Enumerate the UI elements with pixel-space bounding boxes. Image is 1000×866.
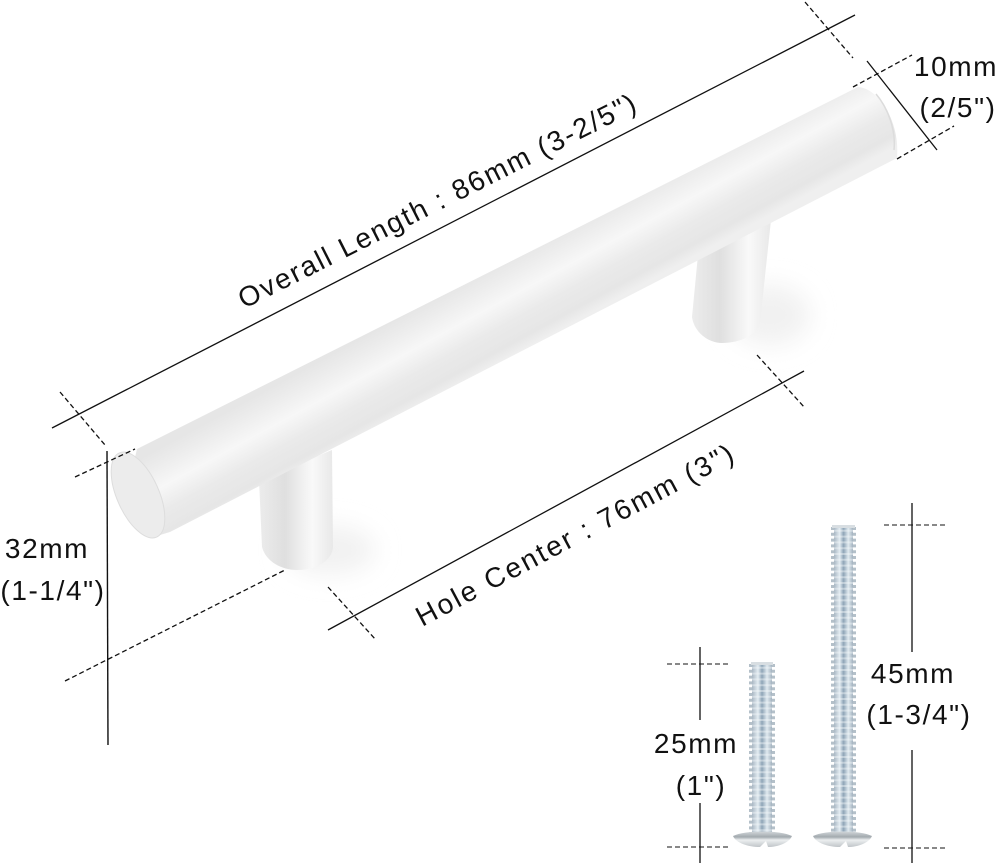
shadow: handle feet	[285, 285, 810, 574]
screw: long	[813, 525, 872, 847]
label: height inches: (1-1/4")	[0, 575, 106, 606]
screw head	[733, 832, 792, 847]
label: hole center: Hole Center : 76mm (3")	[410, 437, 741, 632]
label: height: 32mm	[5, 533, 89, 564]
left end cap	[100, 444, 176, 546]
dimension: hole center	[328, 355, 805, 640]
dimension: height	[0, 449, 285, 745]
label: diameter: 10mm	[914, 51, 998, 82]
dimension: short screw	[654, 647, 738, 863]
screw head	[813, 832, 872, 847]
label: diameter inches: (2/5")	[919, 92, 997, 123]
bar	[125, 87, 897, 538]
label: long screw inches: (1-3/4")	[866, 699, 972, 730]
dimension: overall length	[52, 2, 855, 445]
bar end rim	[876, 94, 894, 150]
left post	[259, 450, 333, 570]
screw: short	[733, 662, 792, 847]
handle	[100, 87, 897, 574]
label: short screw: 25mm	[654, 728, 738, 759]
dimension: long screw	[866, 503, 972, 863]
label: overall length: Overall Length : 86mm (3-2/5")	[233, 87, 643, 314]
label: long screw: 45mm	[871, 658, 955, 689]
label: short screw inches: (1")	[676, 770, 726, 801]
right post	[692, 220, 771, 343]
dimension: diameter	[853, 51, 998, 159]
